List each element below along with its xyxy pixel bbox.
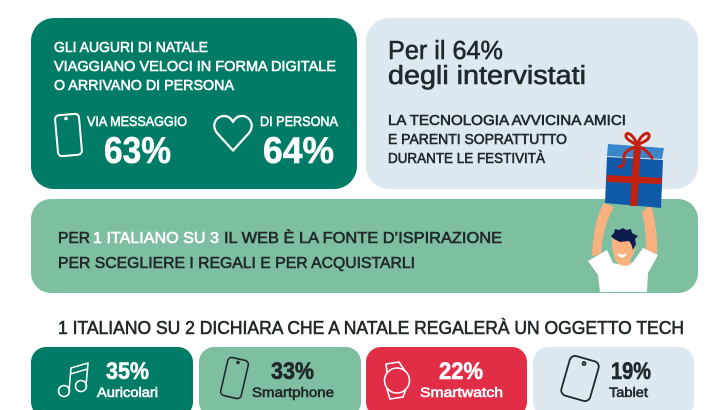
icon: phone bbox=[55, 114, 82, 156]
heading: auguri: VIAGGIANO VELOCI IN FORMA DIGITALE bbox=[54, 59, 336, 75]
panel: web fonte d'ispirazione bbox=[31, 199, 698, 293]
stat: di persona: DI PERSONA bbox=[260, 113, 339, 129]
stat: 33%: Smartphone bbox=[252, 385, 334, 400]
stat: 22% bbox=[420, 358, 503, 400]
arms bbox=[592, 203, 614, 256]
heading: oggetto tech: 1 ITALIANO SU 2 DICHIARA CHE A NATALE REGALERÀ UN OGGETTO TECH bbox=[58, 317, 684, 338]
stat: 19%: Tablet bbox=[609, 385, 648, 400]
text: ispirazione: 1 ITALIANO SU 3 bbox=[93, 230, 219, 247]
text: tecnologia: LA TECNOLOGIA AVVICINA AMICI bbox=[388, 113, 626, 129]
stat: 19%: 19% bbox=[611, 358, 651, 385]
card: smartphone bbox=[199, 347, 361, 410]
heading: per il 64%: Per il 64% bbox=[388, 37, 503, 65]
text: tecnologia: DURANTE LE FESTIVITÀ bbox=[388, 150, 545, 167]
stat: 19% bbox=[609, 358, 651, 400]
stat: 22%: Smartwatch bbox=[420, 385, 503, 400]
panel: auguri di Natale bbox=[31, 18, 357, 189]
stat: 35%: Auricolari bbox=[97, 385, 158, 400]
stat: via messaggio: 63% bbox=[104, 130, 171, 171]
icon: smartwatch bbox=[384, 362, 410, 399]
card: auricolari bbox=[31, 347, 193, 410]
shirt bbox=[588, 248, 658, 292]
card: smartwatch bbox=[366, 347, 527, 410]
panel: 64% degli intervistati bbox=[366, 18, 698, 189]
icon: tablet bbox=[560, 355, 600, 402]
icon: music note bbox=[58, 363, 88, 396]
stat: 35%: 35% bbox=[106, 358, 149, 385]
stat: via messaggio bbox=[87, 113, 187, 171]
heading: auguri: GLI AUGURI DI NATALE bbox=[54, 40, 208, 56]
heading: per il 64% bbox=[388, 37, 586, 90]
stat: di persona bbox=[260, 113, 339, 171]
card: tablet bbox=[533, 347, 694, 410]
illustration: person holding gift bbox=[588, 133, 664, 292]
ribbon bbox=[607, 146, 662, 206]
stat: 35% bbox=[97, 358, 158, 400]
text: ispirazione: PER bbox=[58, 230, 90, 247]
text: ispirazione: IL WEB È LA FONTE D’ISPIRAZIONE bbox=[224, 230, 502, 247]
heading: per il 64%: degli intervistati bbox=[388, 62, 586, 90]
stat: 33% bbox=[252, 358, 334, 400]
text: tecnologia bbox=[388, 113, 626, 167]
gift box bbox=[605, 157, 663, 208]
stat: 22%: 22% bbox=[439, 358, 483, 385]
text: ispirazione bbox=[58, 230, 502, 272]
stat: 33%: 33% bbox=[271, 358, 314, 385]
text: ispirazione: PER SCEGLIERE I REGALI E PER ACQUISTARLI bbox=[58, 255, 415, 272]
icon: smartphone bbox=[220, 357, 249, 399]
heading: auguri bbox=[54, 40, 336, 94]
face bbox=[612, 238, 635, 266]
icon: heart bbox=[214, 116, 252, 150]
heading: auguri: O ARRIVANO DI PERSONA bbox=[54, 78, 234, 94]
text: tecnologia: E PARENTI SOPRATTUTTO bbox=[388, 132, 567, 148]
stat: di persona: 64% bbox=[263, 130, 334, 171]
stat: via messaggio: VIA MESSAGGIO bbox=[87, 113, 187, 129]
hair bbox=[611, 228, 638, 250]
